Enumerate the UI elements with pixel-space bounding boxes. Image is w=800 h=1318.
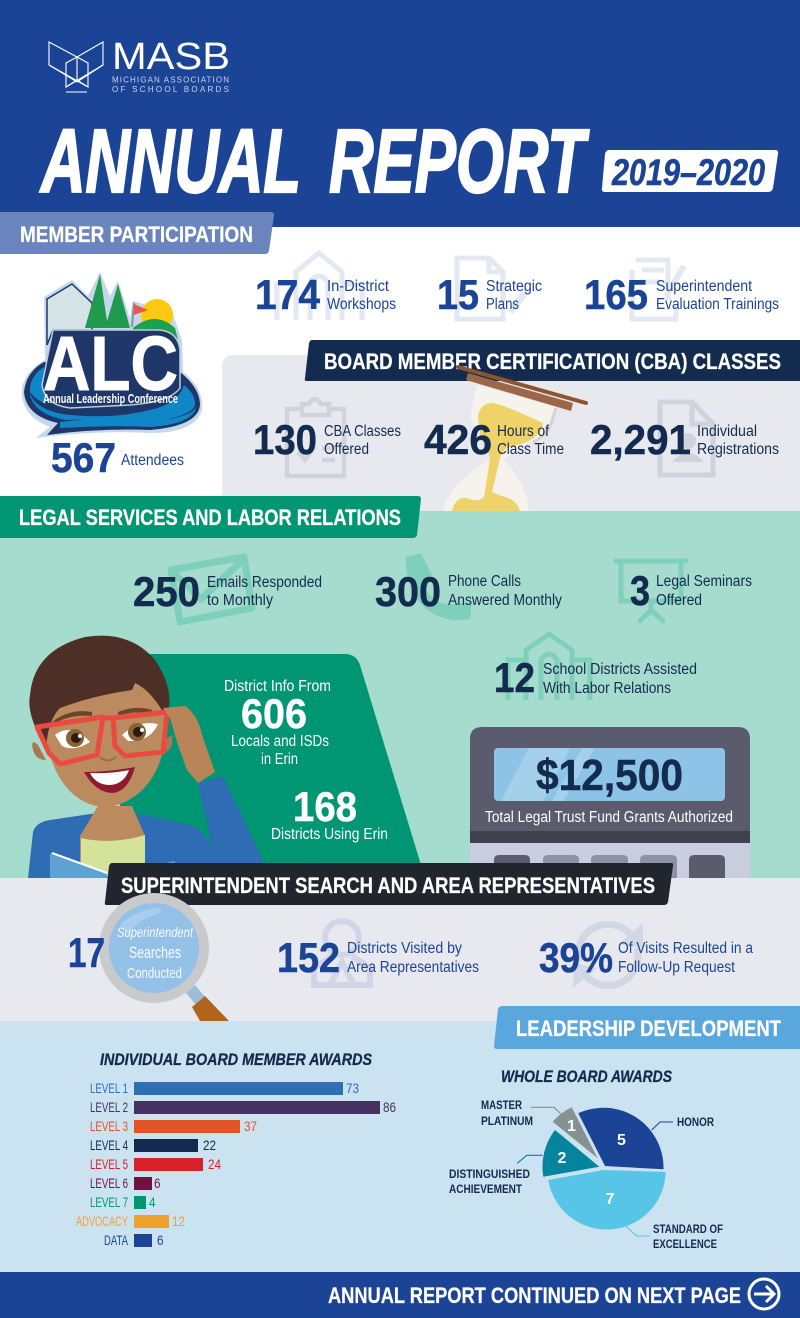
magnifier text: Superintendent (117, 924, 194, 940)
title: REPORT (329, 112, 590, 212)
magnifier text: Searches (129, 943, 181, 962)
year badge: 2019–2020 (611, 152, 765, 193)
panel: leadership development (0, 1006, 800, 1272)
magnifier text: Conducted (127, 966, 182, 982)
icon: notes and pencil (632, 260, 684, 319)
stat: labor relations: 12 (494, 654, 535, 701)
stat: emails: to Monthly (207, 592, 273, 609)
icon: MASB logo mark (49, 42, 103, 92)
stat: strategic plans: 15 (437, 271, 479, 318)
stat: calls (375, 568, 562, 615)
stat: registrations: Individual (697, 423, 757, 440)
icon: arrow in circle (749, 1279, 779, 1309)
stat: emails (133, 568, 322, 615)
bar chart: individual awards: LEVEL 1 (90, 1080, 128, 1096)
pie chart: whole board awards (517, 1107, 673, 1236)
pie labels: EXCELLENCE (653, 1237, 717, 1251)
stat: workshops: Workshops (327, 296, 396, 313)
stat: attendees: 567 (51, 434, 116, 481)
stat: calls: Phone Calls (448, 573, 521, 590)
icon: document and pencil (457, 258, 527, 319)
logo subtitle: OF SCHOOL BOARDS (112, 85, 229, 94)
text: district info: 606 (241, 690, 307, 737)
text: district info: District Info From (224, 678, 331, 695)
panel: superintendent search (0, 863, 800, 1021)
stat: attendees: Attendees (121, 452, 184, 469)
icon: school (508, 634, 590, 700)
stat: superintendent trainings (584, 271, 779, 318)
stat: attendees (51, 434, 184, 481)
stat: districts visited: Area Representatives (347, 959, 479, 976)
pie labels: STANDARD OF (653, 1222, 723, 1236)
heading: member participation (0, 212, 274, 254)
icon: clipboard (287, 399, 344, 476)
calculator (470, 727, 750, 878)
bar chart: individual awards: 22 (203, 1137, 216, 1153)
chart title: individual awards: INDIVIDUAL BOARD MEMBER AWARDS (100, 1050, 373, 1069)
title (40, 112, 590, 212)
stat: labor relations (494, 654, 697, 701)
icon: person (314, 921, 370, 985)
stat: calls: Answered Monthly (448, 592, 562, 609)
bar chart: individual awards: LEVEL 6 (90, 1175, 128, 1191)
bar chart: individual awards: 12 (172, 1213, 185, 1229)
ALC letters: ALC (43, 321, 178, 407)
stat: hours (424, 416, 564, 463)
logo subtitle: MICHIGAN ASSOCIATION (112, 76, 229, 84)
icon: refresh arrows (573, 923, 643, 988)
stat: follow-up requests (539, 934, 753, 981)
icon: school (277, 253, 362, 320)
leader lines (517, 1107, 673, 1236)
stat: labor relations: With Labor Relations (543, 680, 671, 697)
stat: labor relations: School Districts Assisted (543, 661, 697, 678)
pie chart: whole board awards: 2 (558, 1150, 567, 1167)
icon: phone (406, 553, 472, 620)
icon: envelope (171, 557, 252, 622)
icon: document with person (660, 402, 713, 475)
stat: searches number: 17 (68, 929, 105, 976)
magnifier text (117, 924, 194, 982)
stat: workshops: 174 (255, 271, 321, 318)
text: district info: in Erin (261, 751, 298, 768)
panel: CBA classes (222, 340, 800, 511)
slice values: 5 (617, 1132, 626, 1149)
calculator screen: $12,500 (536, 751, 683, 800)
calculator caption: Total Legal Trust Fund Grants Authorized (485, 809, 733, 826)
pie labels (449, 1098, 723, 1251)
stat: districts visited: Districts Visited by (347, 940, 462, 957)
logo subtitle (112, 76, 229, 94)
pie labels: MASTER (481, 1098, 522, 1112)
stat: hours: Class Time (497, 441, 564, 458)
pie labels: ACHIEVEMENT (449, 1182, 523, 1196)
stat: CBA classes offered (253, 416, 401, 463)
heading: CBA classes (305, 340, 800, 381)
heading: leadership development (494, 1006, 800, 1049)
panel: Erin stats (120, 654, 425, 878)
stat: districts visited (277, 934, 479, 981)
ALC logo (22, 272, 202, 438)
bar chart: individual awards: 37 (244, 1118, 257, 1134)
icon: graduation cap board (458, 367, 586, 411)
icon: magnifying glass (104, 898, 229, 1021)
stat: follow-up requests: Of Visits Resulted in a (618, 940, 753, 957)
stat: seminars: Legal Seminars (656, 573, 752, 590)
pie chart: whole board awards: 7 (606, 1191, 615, 1208)
header band (0, 0, 800, 227)
bar chart: individual awards: LEVEL 5 (90, 1156, 128, 1172)
stat: seminars (630, 567, 752, 614)
stat: superintendent trainings: Evaluation Trainings (656, 296, 779, 313)
bar chart: individual awards: LEVEL 7 (90, 1194, 128, 1210)
bar chart: individual awards: 24 (208, 1156, 221, 1172)
stat: strategic plans: Plans (486, 296, 519, 313)
text: districts using Erin: 168 (293, 783, 357, 830)
bar chart: individual awards: DATA (104, 1232, 128, 1248)
stat: districts visited: 152 (277, 934, 340, 981)
stat: strategic plans (437, 271, 542, 318)
bar chart: individual awards: LEVEL 3 (90, 1118, 128, 1134)
stat: follow-up requests: 39% (539, 934, 613, 981)
stat: CBA classes offered: Offered (324, 441, 369, 458)
bar chart: individual awards: LEVEL 4 (90, 1137, 128, 1153)
heading: legal services: LEGAL SERVICES AND LABOR RELATIONS (19, 505, 401, 530)
bar chart: individual awards: ADVOCACY (76, 1213, 128, 1229)
panel: member participation (22, 253, 779, 481)
heading: legal services (0, 496, 421, 538)
heading: member participation: MEMBER PARTICIPATION (20, 222, 253, 247)
stat: CBA classes offered: CBA Classes (324, 423, 401, 440)
stat: workshops (255, 271, 396, 318)
bar chart: individual awards: LEVEL 2 (90, 1099, 128, 1115)
bar chart: individual awards (76, 1080, 396, 1248)
stat: hours: Hours of (497, 423, 550, 440)
pie labels: DISTINGUISHED (449, 1167, 530, 1181)
bar chart: individual awards: 6 (157, 1232, 164, 1248)
bar chart: individual awards: 4 (149, 1194, 156, 1210)
pie labels: PLATINUM (481, 1114, 533, 1128)
stat: seminars: 3 (630, 567, 650, 614)
pie chart: whole board awards: 1 (567, 1118, 576, 1135)
text: districts using Erin: Districts Using Erin (271, 826, 388, 843)
logo wordmark: MASB (112, 36, 230, 78)
stat: strategic plans: Strategic (486, 278, 542, 295)
stat: emails: Emails Responded (207, 574, 322, 591)
stat: registrations: 2,291 (590, 416, 691, 463)
stat: CBA classes offered: 130 (253, 416, 317, 463)
text: districts using Erin (271, 783, 388, 843)
stat: superintendent trainings: 165 (584, 271, 648, 318)
ALC subtitle: Annual Leadership Conference (43, 391, 178, 406)
chart title: whole board awards: WHOLE BOARD AWARDS (501, 1067, 673, 1086)
stat: superintendent trainings: Superintendent (656, 278, 753, 295)
text: district info (224, 678, 331, 768)
icon: presentation board (616, 561, 686, 621)
stat: calls: 300 (375, 568, 441, 615)
heading: superintendent search: SUPERINTENDENT SEARCH AND AREA REPRESENTATIVES (121, 873, 655, 898)
stat: seminars: Offered (656, 592, 702, 609)
stat: registrations: Registrations (697, 441, 779, 458)
text: district info: Locals and ISDs (231, 733, 329, 750)
illustration: woman with glasses (28, 636, 268, 878)
pie labels: HONOR (677, 1115, 714, 1129)
heading: superintendent search (105, 863, 673, 905)
icon: hourglass (443, 385, 557, 511)
bar chart: individual awards: 86 (383, 1099, 396, 1115)
calculator keys (494, 855, 725, 878)
footer (0, 1272, 800, 1318)
calculator screen (494, 748, 725, 801)
stat: registrations (590, 416, 779, 463)
title: ANNUAL (40, 112, 301, 212)
bar chart: individual awards: 6 (154, 1175, 161, 1191)
stat: hours: 426 (424, 416, 492, 463)
stat: emails: 250 (133, 568, 200, 615)
bar chart: individual awards: 73 (346, 1080, 359, 1096)
stat: follow-up requests: Follow-Up Request (618, 959, 736, 976)
stat: workshops: In-District (327, 278, 390, 295)
panel: legal services (0, 511, 800, 878)
